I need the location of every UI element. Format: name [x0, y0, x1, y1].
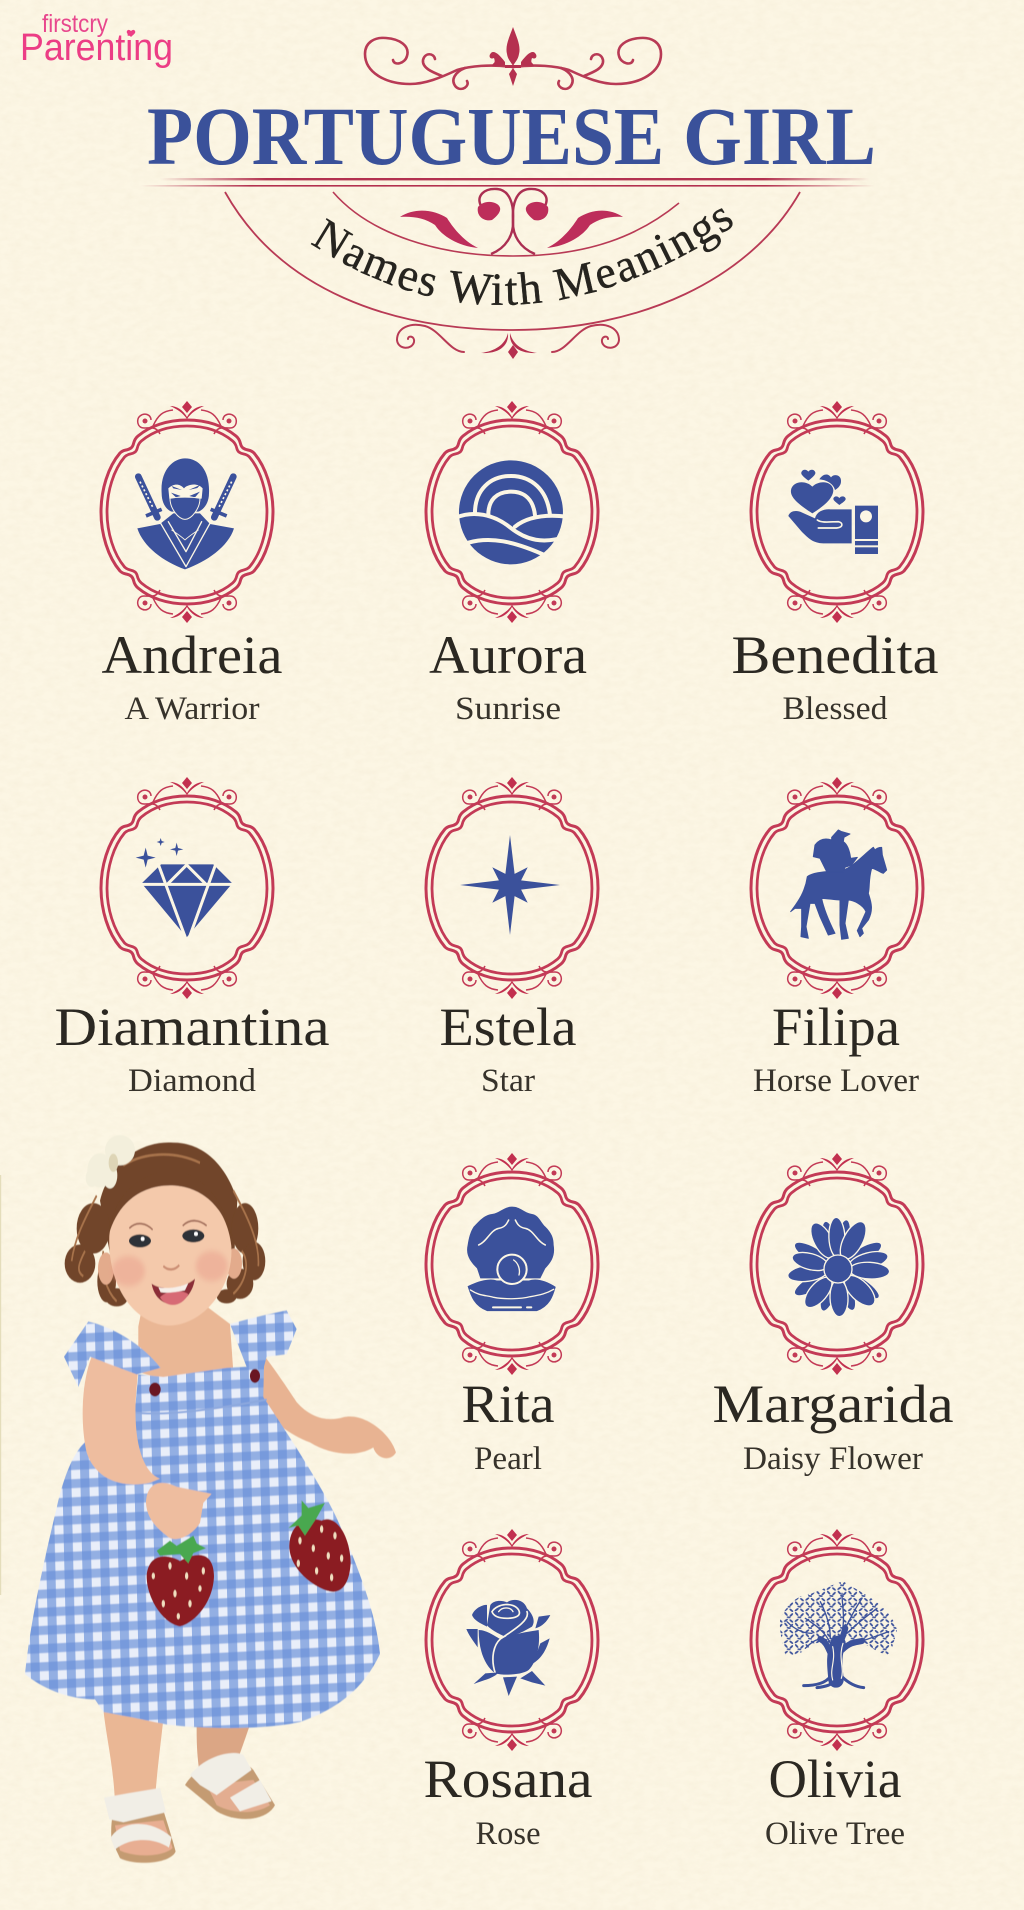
frame: Benedita	[751, 401, 923, 623]
left arm	[83, 1357, 160, 1484]
logo: FirstCry Parenting: firstcry	[42, 10, 108, 38]
icon: daisy flower	[787, 1217, 890, 1317]
card: Filipa	[751, 777, 923, 1099]
name: Rosana	[424, 1749, 593, 1809]
card: Benedita	[732, 401, 939, 727]
icon: horse and rider	[791, 830, 887, 939]
legs	[103, 1709, 163, 1803]
left sandal	[111, 1795, 176, 1863]
frame: Olivia	[751, 1529, 923, 1751]
frame: Rosana	[426, 1529, 598, 1751]
card: Rosana	[424, 1529, 598, 1852]
icon: ninja warrior	[137, 458, 234, 569]
icon: eight-point star	[460, 835, 560, 935]
frame: Filipa	[751, 777, 923, 999]
name: Filipa	[772, 997, 900, 1057]
icon: hearts in hand	[788, 470, 878, 554]
meaning: Horse Lover	[753, 1063, 919, 1099]
bodice seam	[133, 1400, 267, 1414]
frame: Margarida	[751, 1153, 923, 1375]
hand	[146, 1483, 212, 1539]
name: Estela	[440, 997, 577, 1057]
card: Estela	[426, 777, 598, 1099]
meaning: Daisy Flower	[743, 1441, 923, 1477]
illustration: smiling toddler in gingham dress	[25, 1135, 396, 1863]
meaning: Sunrise	[455, 691, 561, 727]
name: Diamantina	[54, 997, 330, 1057]
title rules	[140, 178, 875, 187]
card: Olivia	[751, 1529, 923, 1852]
face	[109, 1183, 231, 1326]
front hair	[110, 1170, 232, 1236]
card: Margarida	[712, 1153, 954, 1477]
header ornament: top fleur and scrolls	[365, 27, 661, 89]
right arm and hand	[257, 1357, 396, 1458]
name: Margarida	[712, 1374, 954, 1434]
bottom header ornament	[397, 325, 619, 359]
card: Aurora	[426, 401, 598, 727]
right sandal	[185, 1761, 275, 1819]
eyes	[129, 1234, 151, 1247]
card: Rita	[426, 1153, 598, 1477]
meaning: Star	[481, 1063, 535, 1099]
neck and chest	[138, 1301, 233, 1379]
subtitle: Names With Meanings	[310, 208, 733, 306]
left strawberry	[147, 1555, 214, 1626]
title: PORTUGUESE GIRL	[147, 90, 876, 182]
card: Andreia	[101, 401, 283, 727]
meaning: Blessed	[782, 691, 888, 727]
mouth	[152, 1279, 195, 1304]
name: Aurora	[429, 625, 587, 685]
meaning: Diamond	[128, 1063, 257, 1099]
buttons	[149, 1382, 161, 1397]
icon: sunrise over waves	[457, 460, 567, 564]
name: Andreia	[102, 625, 283, 685]
logo: FirstCry Parenting: Parenting	[20, 27, 173, 69]
icon: olive tree	[780, 1582, 897, 1688]
meaning: Olive Tree	[765, 1816, 905, 1852]
meaning: Rose	[476, 1816, 540, 1852]
frame: Estela	[426, 777, 598, 999]
frame: Diamantina	[101, 777, 273, 999]
frame: Aurora	[426, 401, 598, 623]
subtitle arcs and ornament	[225, 189, 800, 330]
right strawberry	[289, 1519, 351, 1592]
meaning: A Warrior	[124, 691, 260, 727]
back hair with curls	[65, 1142, 265, 1306]
sleeves	[64, 1322, 161, 1387]
icon: pearl in shell	[467, 1207, 556, 1312]
ears	[98, 1252, 114, 1285]
icon: rose	[466, 1600, 550, 1696]
name: Benedita	[732, 625, 939, 685]
logo: FirstCry Parenting	[20, 10, 173, 69]
name: Olivia	[768, 1749, 902, 1809]
frame: Andreia	[101, 401, 273, 623]
icon: diamond with sparkles	[136, 838, 235, 938]
meaning: Pearl	[474, 1441, 542, 1477]
frame: Rita	[426, 1153, 598, 1375]
hair flower	[86, 1135, 135, 1189]
skirt and bodice	[25, 1366, 380, 1728]
name: Rita	[462, 1374, 555, 1434]
nose	[163, 1265, 179, 1269]
card: Diamantina	[54, 777, 330, 1099]
